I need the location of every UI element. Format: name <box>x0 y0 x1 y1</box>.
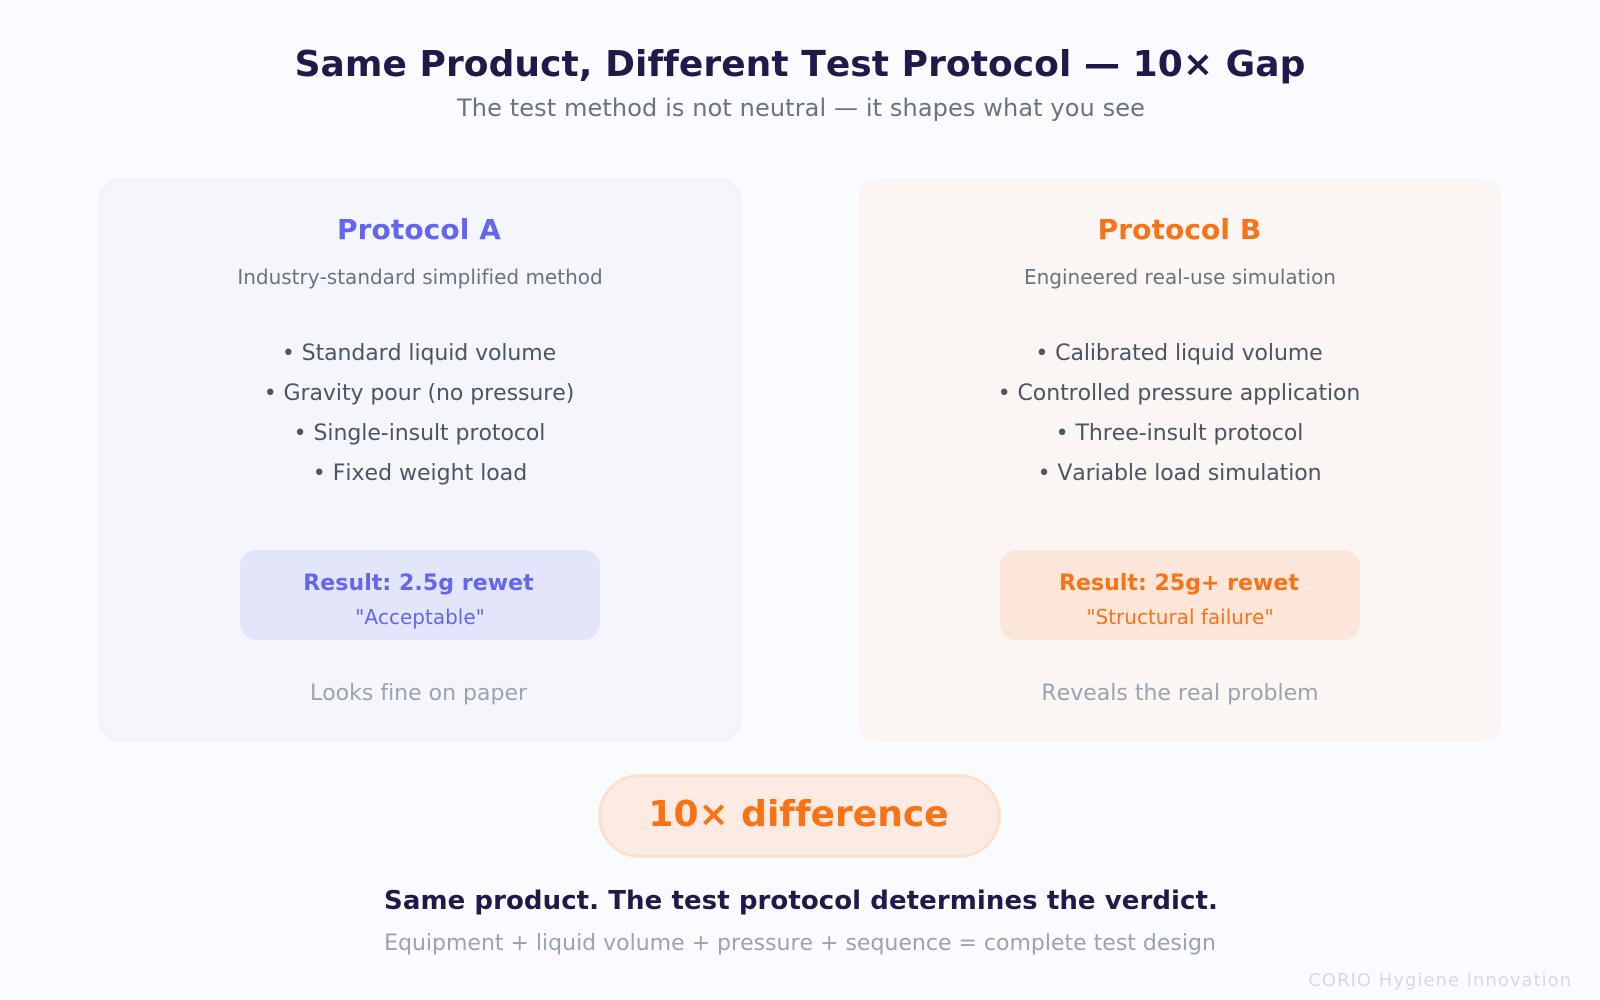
conclusion detail: Equipment + liquid volume + pressure + sequence = complete test design <box>384 931 1216 956</box>
callout: 10x difference: 10× difference <box>648 794 949 835</box>
conclusion heading: Same product. The test protocol determines the verdict. <box>384 886 1218 916</box>
panel A feature list <box>264 341 574 486</box>
panel B feature list <box>998 341 1360 486</box>
panel A result box: "Acceptable" <box>355 605 485 629</box>
panel: Protocol A <box>99 179 741 741</box>
panel A feature list: • Single-insult protocol <box>294 421 545 446</box>
panel B feature list: • Controlled pressure application <box>998 381 1360 406</box>
panel A note: Looks fine on paper <box>310 681 527 706</box>
panel A description: Industry-standard simplified method <box>237 265 603 289</box>
panel B feature list: • Calibrated liquid volume <box>1035 341 1323 366</box>
panel B heading: Protocol B <box>1098 213 1261 246</box>
panel B result box: Result: 25g+ rewet <box>1059 571 1299 596</box>
panel B result box <box>1000 550 1360 640</box>
title: Same Product, Different Test Protocol — 10× Gap <box>295 44 1305 85</box>
panel A heading: Protocol A <box>337 213 501 246</box>
panel B note: Reveals the real problem <box>1041 681 1319 706</box>
panel A result box <box>240 550 600 640</box>
callout: 10x difference <box>598 774 1001 858</box>
panel A feature list: • Fixed weight load <box>313 461 527 486</box>
panel: Protocol B <box>859 179 1501 741</box>
panel B feature list: • Three-insult protocol <box>1056 421 1303 446</box>
subtitle: The test method is not neutral — it shapes what you see <box>457 94 1145 122</box>
panel A feature list: • Standard liquid volume <box>282 341 556 366</box>
panel A feature list: • Gravity pour (no pressure) <box>264 381 574 406</box>
footer credit: CORIO Hygiene Innovation <box>1308 970 1572 991</box>
panel B feature list: • Variable load simulation <box>1038 461 1321 486</box>
panel B result box: "Structural failure" <box>1086 605 1274 629</box>
panel B description: Engineered real-use simulation <box>1024 265 1336 289</box>
panel A result box: Result: 2.5g rewet <box>303 571 534 596</box>
